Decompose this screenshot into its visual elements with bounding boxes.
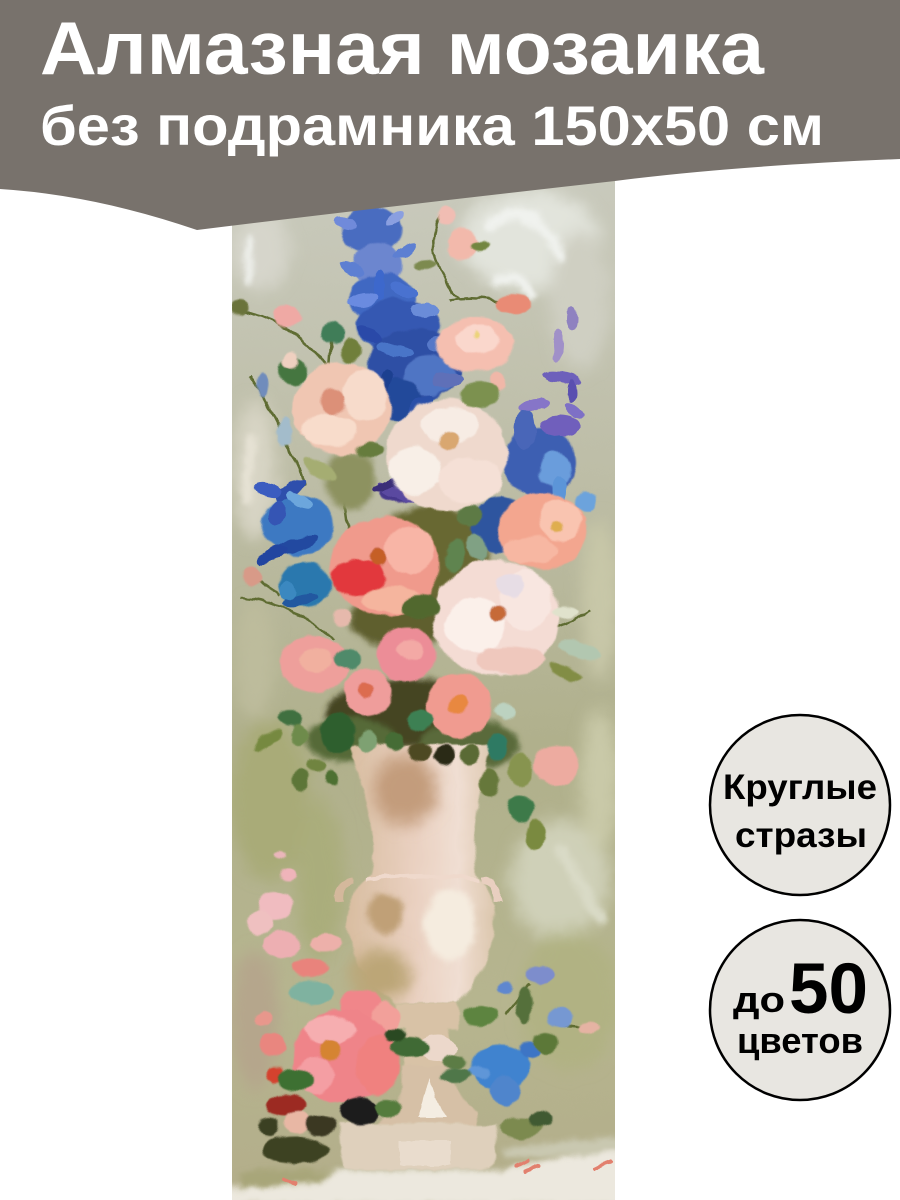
salmon rose right xyxy=(498,493,588,569)
leaves bouquet xyxy=(251,240,603,851)
pink rose upper left xyxy=(293,362,391,454)
badge text: rhinestones: стразы xyxy=(735,816,867,855)
pink blossoms lower left xyxy=(247,851,341,1083)
plinth xyxy=(339,1124,497,1170)
banner shape xyxy=(0,0,900,230)
vase body xyxy=(347,745,495,1003)
title: Алмазная мозаика xyxy=(40,6,765,90)
delphinium petals xyxy=(253,208,588,610)
badge number: 50: 50 xyxy=(789,950,868,1029)
badge: up to 50 colours xyxy=(710,920,890,1100)
badge text: round: Круглые xyxy=(723,768,877,807)
vase xyxy=(339,745,497,1170)
subtitle: без подрамника 150х50 см xyxy=(40,94,824,157)
blue delphiniums xyxy=(257,206,595,607)
small pink roses cluster xyxy=(279,627,579,785)
painting background brushwork xyxy=(230,190,620,1090)
blue flowers lower right xyxy=(441,966,601,1138)
badge text: colours: цветов xyxy=(737,1020,863,1061)
foliage mass xyxy=(305,450,520,769)
red rose centre xyxy=(330,516,440,616)
painting: floral bouquet in a vase xyxy=(220,170,630,1200)
badge text: up to: до xyxy=(733,979,785,1020)
floor xyxy=(225,1136,630,1200)
dark foliage lower left xyxy=(260,1028,467,1164)
vase stem and foot xyxy=(396,1003,458,1068)
vase handles xyxy=(340,880,497,902)
stems xyxy=(240,215,590,1027)
header banner xyxy=(0,0,900,230)
large pink peony lower left xyxy=(293,988,400,1102)
badge: round rhinestones xyxy=(710,715,890,895)
pink buds top xyxy=(231,207,530,626)
white rose centre xyxy=(387,399,507,511)
big white rose xyxy=(433,560,559,676)
pink rose top xyxy=(437,317,513,371)
